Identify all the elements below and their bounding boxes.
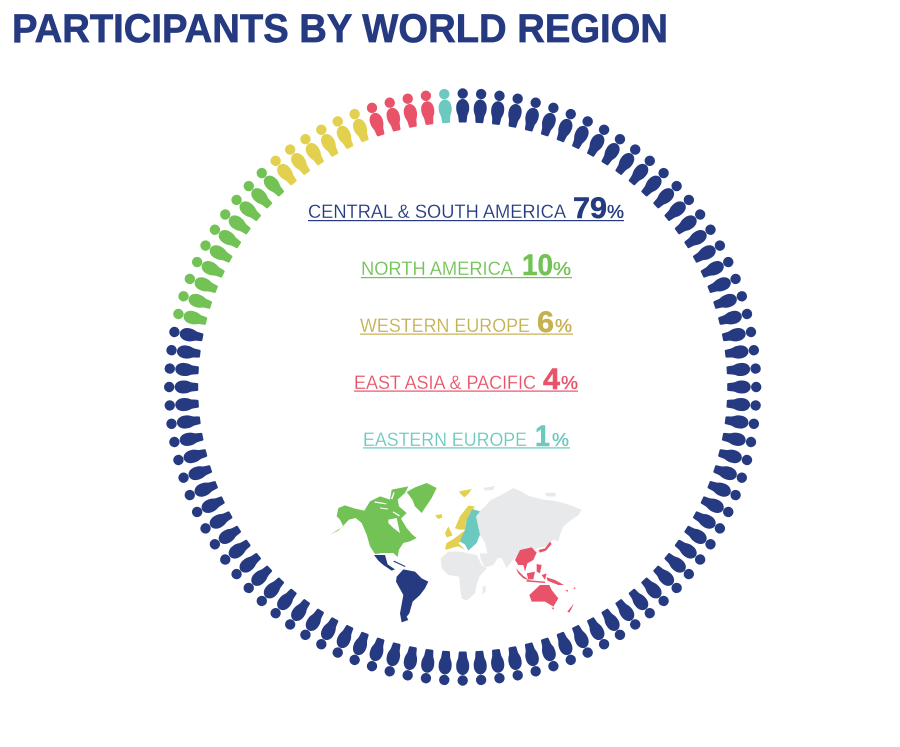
title: PARTICIPANTS BY WORLD REGION [12,7,668,51]
legend: Western Europe 6%: WESTERN EUROPE [360,315,530,337]
legend: East Asia & Pacific 4%: % [561,373,578,393]
legend: Eastern Europe 1%: 1 [535,420,550,453]
map: rest of world, grey [441,486,582,601]
map: North America, green [330,483,437,557]
legend: North America 10%: % [553,259,571,279]
people: East Asia & Pacific, 4 icons [364,90,436,137]
map: East Asia and Pacific, red [515,542,576,613]
map: Eastern Europe, teal [460,509,480,551]
legend: Central & South America 79%: CENTRAL & SOUTH AMERICA [308,201,566,223]
legend: East Asia & Pacific 4%: 4 [543,363,561,396]
legend: Western Europe 6%: % [555,316,572,336]
people: Western Europe, 6 icons [267,107,371,187]
legend: East Asia & Pacific 4%: EAST ASIA & PACIFIC [354,372,536,394]
legend: North America 10%: 10 [522,249,553,282]
people: Central & South America, 79 icons [164,88,761,686]
legend: Western Europe 6% [360,306,573,339]
legend: North America 10%: NORTH AMERICA [361,258,513,280]
legend: Eastern Europe 1%: % [552,430,569,450]
legend: Central & South America 79%: 79 [573,192,607,225]
legend: North America 10% [361,249,572,282]
legend: Central & South America 79%: % [607,202,624,222]
map: Central and South America, navy [374,555,428,622]
map: Western Europe, yellow [435,489,475,550]
legend: Eastern Europe 1%: EASTERN EUROPE [363,429,527,451]
legend: East Asia & Pacific 4% [354,363,578,396]
legend: Central & South America 79% [308,192,624,225]
people: Eastern Europe, 1 icon [437,88,453,123]
legend: Eastern Europe 1% [363,420,570,453]
people: North America, 10 icons [172,165,286,328]
legend: Western Europe 6%: 6 [537,306,554,339]
ring of 100 people icons [164,88,761,686]
world map [330,483,582,622]
